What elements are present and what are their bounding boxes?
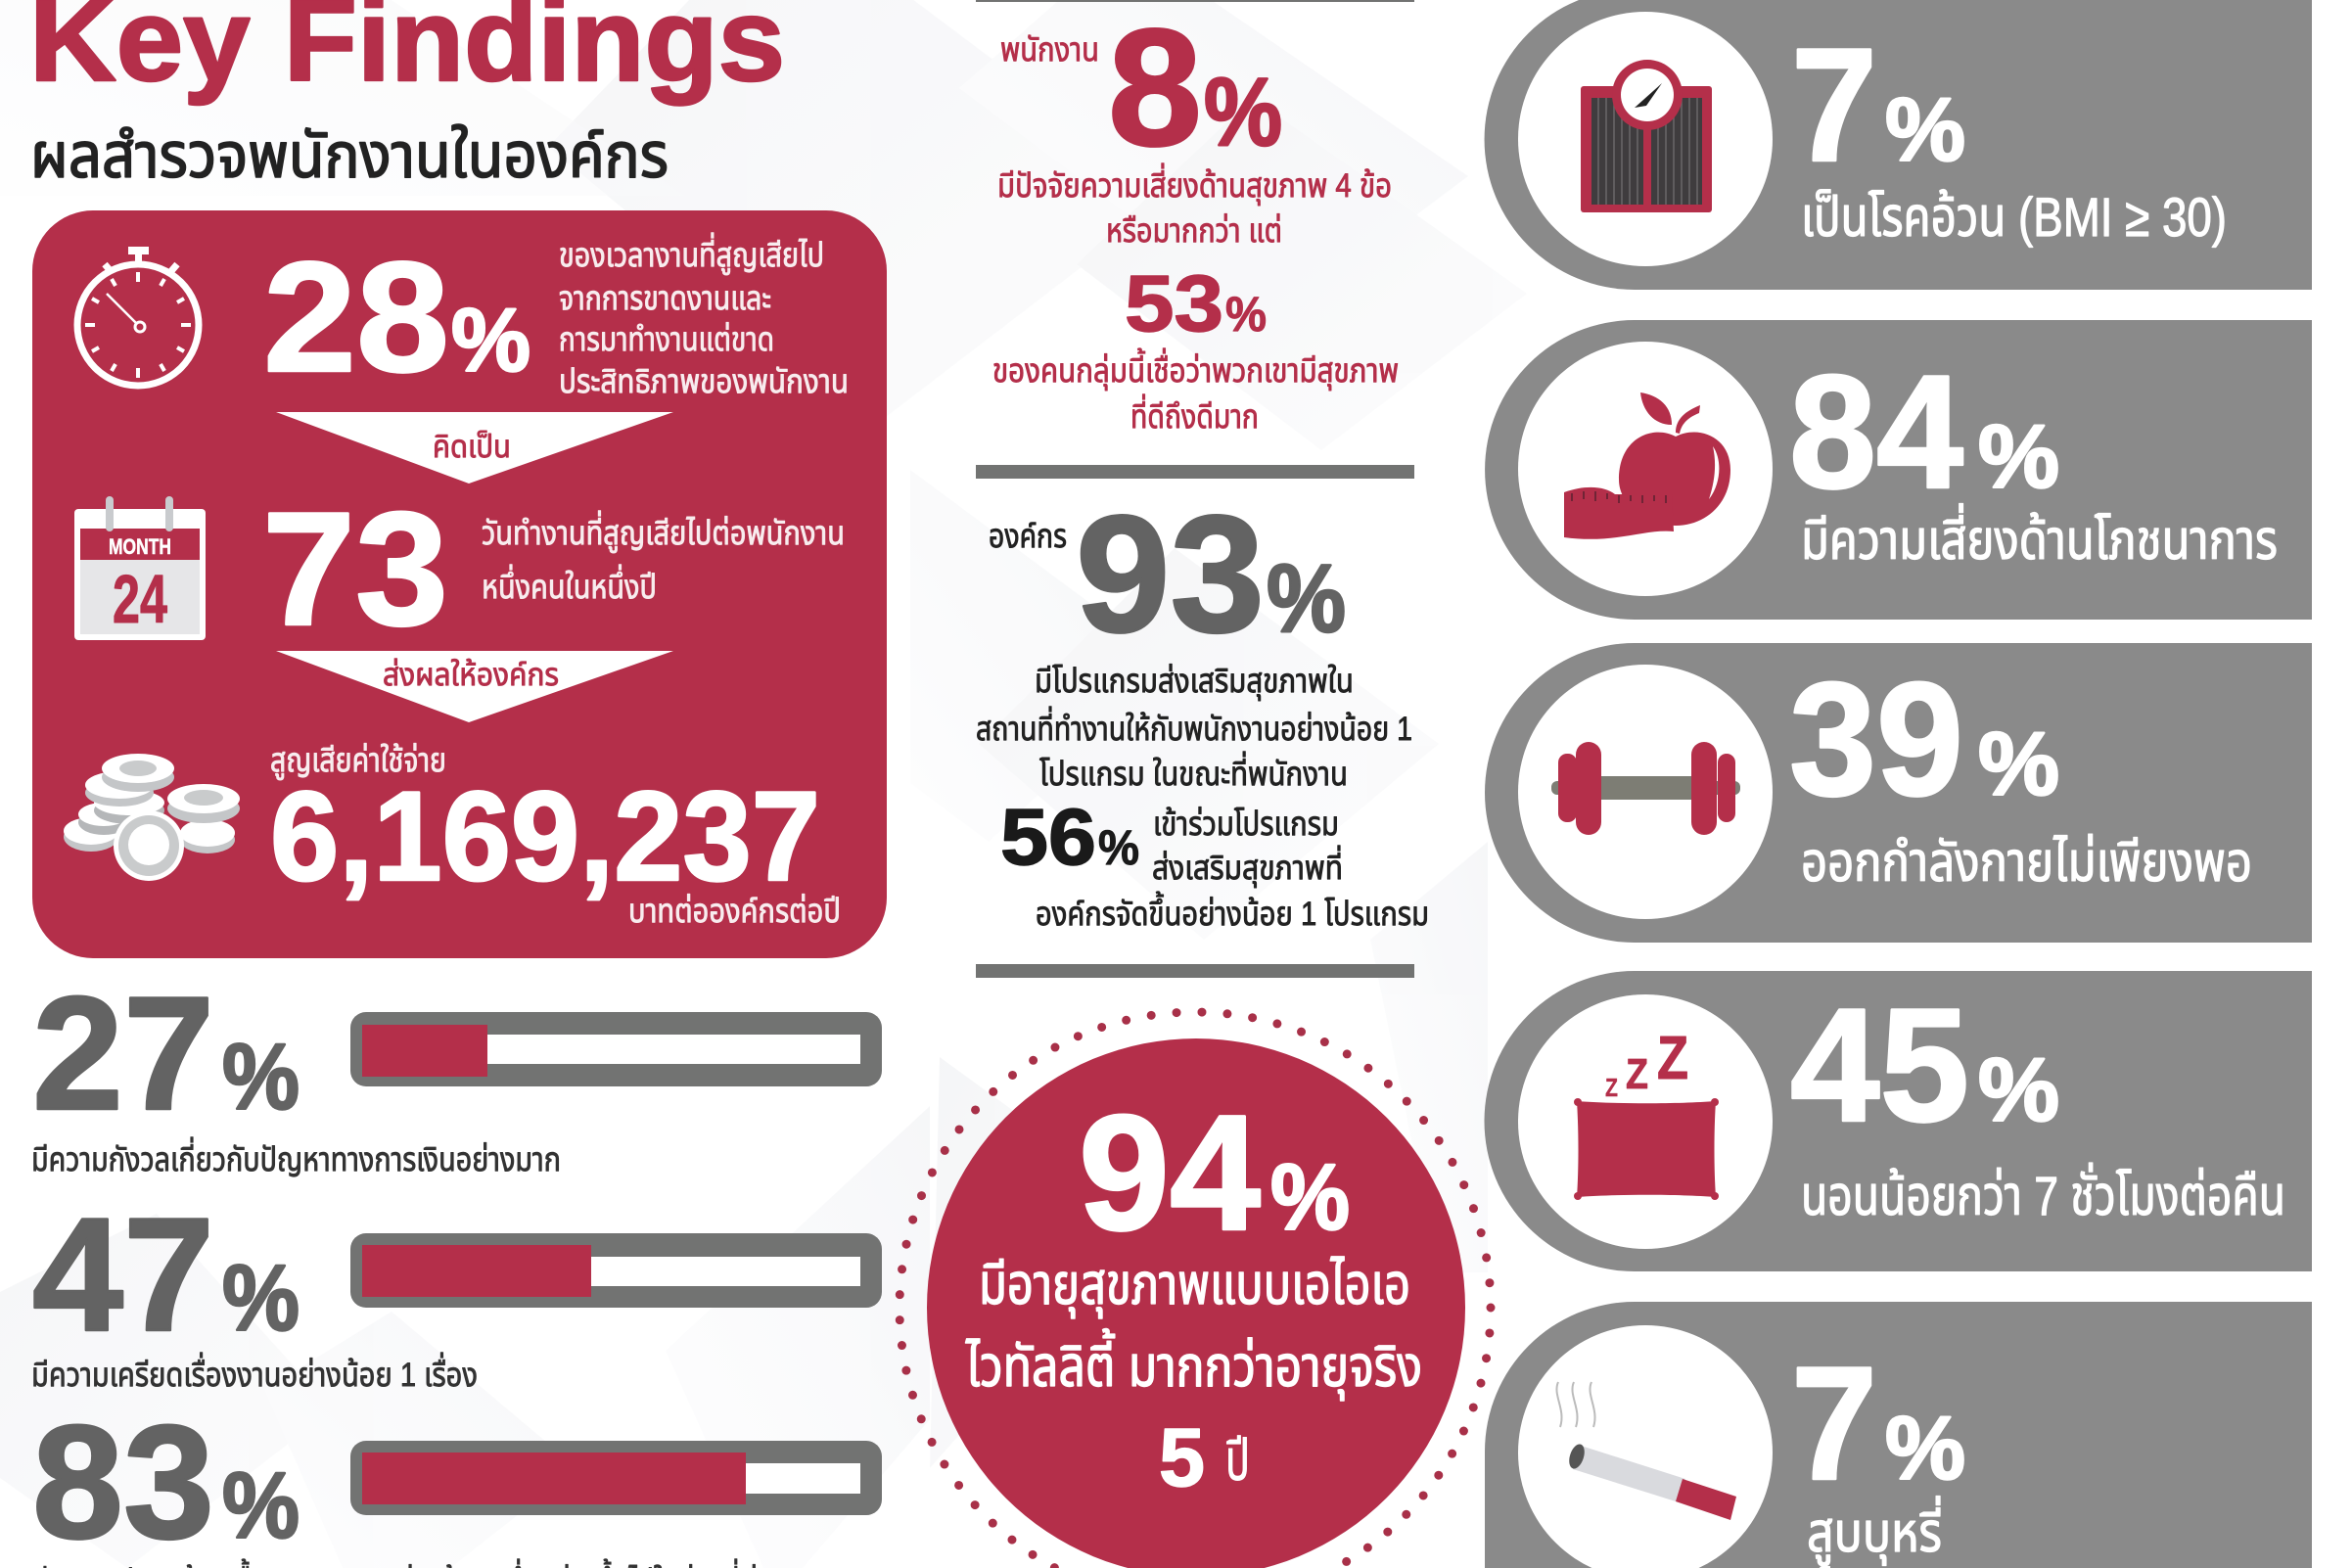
text: 73 description: วันทำงานที่สูญเสียไปต่อพนักงาน <box>482 510 845 553</box>
text: 47% label: มีความเครียดเรื่องงานอย่างน้อย 1 เรื่อง <box>31 1352 478 1394</box>
stat: 7% smoking <box>1791 1333 1965 1513</box>
block: employees 8% <box>992 0 1399 436</box>
block: organisations 93%: โปรแกรม ในขณะที่พนักงาน <box>1039 751 1348 793</box>
text: 73 description <box>482 510 845 606</box>
stat: 45% <box>1790 975 2059 1155</box>
text: 28% description: ของเวลางานที่สูญเสียไป <box>559 232 824 275</box>
callout: 94% circle: % <box>1270 1145 1350 1250</box>
panel: smoking <box>1485 1302 2312 1568</box>
bar: 27% <box>350 1012 882 1086</box>
block: employees 8%: ที่ดีถึงดีมาก <box>1130 393 1259 436</box>
block: employees 8%: ของคนกลุ่มนี้เชื่อว่าพวกเขามีสุขภาพ <box>992 347 1399 391</box>
arrow: effect on organisation: ส่งผลให้องค์กร <box>383 657 559 692</box>
block: employees 8%: 8 <box>1108 0 1202 181</box>
text: 28% description: ประสิทธิภาพของพนักงาน <box>559 363 849 400</box>
arrow: effect on organisation <box>276 651 673 722</box>
icon: stopwatch <box>77 247 199 386</box>
stat block: 27% financial worry: 27 <box>32 963 214 1143</box>
icon: apple and tape <box>1564 392 1730 539</box>
text: 28% description <box>559 232 849 400</box>
panel: sleep <box>1484 971 2312 1271</box>
block: organisations 93%: สถานที่ทำงานให้กับพนักงานอย่างน้อย 1 <box>976 706 1412 748</box>
stat block: 27% financial worry: % <box>222 1025 300 1130</box>
stat: 45%: 45 <box>1790 975 1969 1155</box>
stat: 28%: 28 <box>263 229 449 404</box>
callout: 94% circle: ไวทัลลิตี้ มากกว่าอายุจริง <box>965 1328 1422 1401</box>
text: 73 description: หนึ่งคนในหนึ่งปี <box>482 564 657 606</box>
block: organisations 93%: 56 <box>1000 793 1096 882</box>
bar: 47% <box>350 1233 882 1308</box>
arrow: equals <box>276 412 673 484</box>
callout: 94% circle: 94 <box>1079 1081 1261 1265</box>
block: organisations 93%: ส่งเสริมสุขภาพที่ <box>1152 845 1343 888</box>
block: employees 8%: % <box>1204 58 1282 165</box>
stat block: 83%: % <box>222 1453 300 1558</box>
icon: coins <box>64 754 240 881</box>
stat block: 47% work stress <box>31 1184 882 1394</box>
icon: pillow and Z: Z <box>1605 1073 1618 1102</box>
stat: 7%: % <box>1885 80 1965 180</box>
stat: 39% <box>1789 649 2059 829</box>
icon: dumbbell <box>1551 742 1740 835</box>
stat: 7% <box>1791 15 1965 195</box>
block: organisations 93%: เข้าร่วมโปรแกรม <box>1153 806 1339 843</box>
icon: pillow and Z: Z <box>1626 1050 1648 1098</box>
panel: nutrition <box>1485 320 2312 620</box>
block: organisations 93%: องค์กรจัดขึ้นอย่างน้อย 1 โปรแกรม <box>1036 891 1429 933</box>
block: organisations 93%: มีโปรแกรมส่งเสริมสุขภาพใน <box>1035 663 1354 701</box>
callout: 94% circle <box>899 1012 1491 1568</box>
icon: scale <box>1581 60 1712 212</box>
callout: 94% circle: ปี <box>1225 1429 1250 1493</box>
stat block: 83% <box>31 1392 882 1568</box>
block: employees 8%: หรือมากกว่า แต่ <box>1106 212 1282 250</box>
panel: exercise <box>1485 643 2312 943</box>
block: organisations 93%: 93 <box>1076 482 1265 668</box>
stat: 39%: % <box>1978 715 2059 814</box>
block: organisations 93% <box>976 482 1429 933</box>
icon: calendar <box>74 496 206 640</box>
text: baht per organisation per year: บาทต่อองค์กรต่อปี <box>628 893 841 930</box>
text: nutrition label: มีความเสี่ยงด้านโภชนาการ <box>1801 503 2278 571</box>
stat block: 27% financial worry <box>31 963 882 1178</box>
stat: 7% smoking: % <box>1885 1399 1965 1499</box>
icon: pillow and Z: Z <box>1657 1025 1688 1092</box>
stat: 7% smoking: 7 <box>1791 1333 1877 1513</box>
block: organisations 93%: % <box>1267 544 1346 652</box>
text: 28% description: การมาทำงานแต่ขาด <box>559 321 774 358</box>
panel: cost of lost work time <box>32 210 887 958</box>
bar: 83% <box>350 1441 882 1515</box>
icon: calendar: MONTH <box>109 534 171 559</box>
icon: pillow and Z <box>1574 1025 1719 1200</box>
text: smoking label: สูบบุหรี่ <box>1807 1496 1942 1566</box>
stat block: 47% work stress: 47 <box>32 1184 214 1364</box>
text: exercise label: ออกกำลังกายไม่เพียงพอ <box>1801 831 2252 893</box>
stat: 6,169,237: 6,169,237 <box>270 764 820 907</box>
subtitle: ผลสำรวจพนักงานในองค์กร <box>30 120 669 191</box>
block: employees 8%: มีปัจจัยความเสี่ยงด้านสุขภาพ 4 ข้อ <box>997 162 1392 206</box>
block: employees 8%: 53 <box>1125 259 1223 348</box>
stat: 73 days: 73 <box>262 479 448 659</box>
stat: 84%: % <box>1978 407 2059 507</box>
block: employees 8%: % <box>1225 287 1267 342</box>
block: organisations 93%: % <box>1098 820 1139 875</box>
stat: 28%: % <box>451 291 530 391</box>
panel: obesity <box>1485 0 2312 290</box>
stat block: 83%: 83 <box>32 1392 214 1568</box>
stat: 28% <box>263 229 530 404</box>
stat: 84%: 84 <box>1789 342 1963 522</box>
text: lost cost label: สูญเสียค่าใช้จ่าย <box>270 742 446 780</box>
block: organisations 93%: องค์กร <box>989 518 1067 555</box>
text: obesity label: เป็นโรคอ้วน (BMI ≥ 30) <box>1801 186 2227 248</box>
stat block: 47% work stress: % <box>222 1246 300 1351</box>
text: 28% description: จากการขาดงานและ <box>559 280 771 317</box>
stat: 7%: 7 <box>1791 15 1877 195</box>
block: employees 8%: พนักงาน <box>1000 31 1099 69</box>
icon: cigarette <box>1556 1382 1736 1520</box>
stat: 45%: % <box>1978 1040 2059 1140</box>
icon: calendar: 24 <box>113 561 167 637</box>
text: 27% label: มีความกังวลเกี่ยวกับปัญหาทางการเงินอย่างมาก <box>31 1136 561 1178</box>
stat: 39%: 39 <box>1789 649 1963 829</box>
stat: 84% <box>1789 342 2059 522</box>
arrow: equals: คิดเป็น <box>433 429 511 464</box>
callout: 94% circle: 5 <box>1159 1411 1205 1503</box>
callout: 94% circle: มีอายุสุขภาพแบบเอไอเอ <box>979 1253 1410 1318</box>
